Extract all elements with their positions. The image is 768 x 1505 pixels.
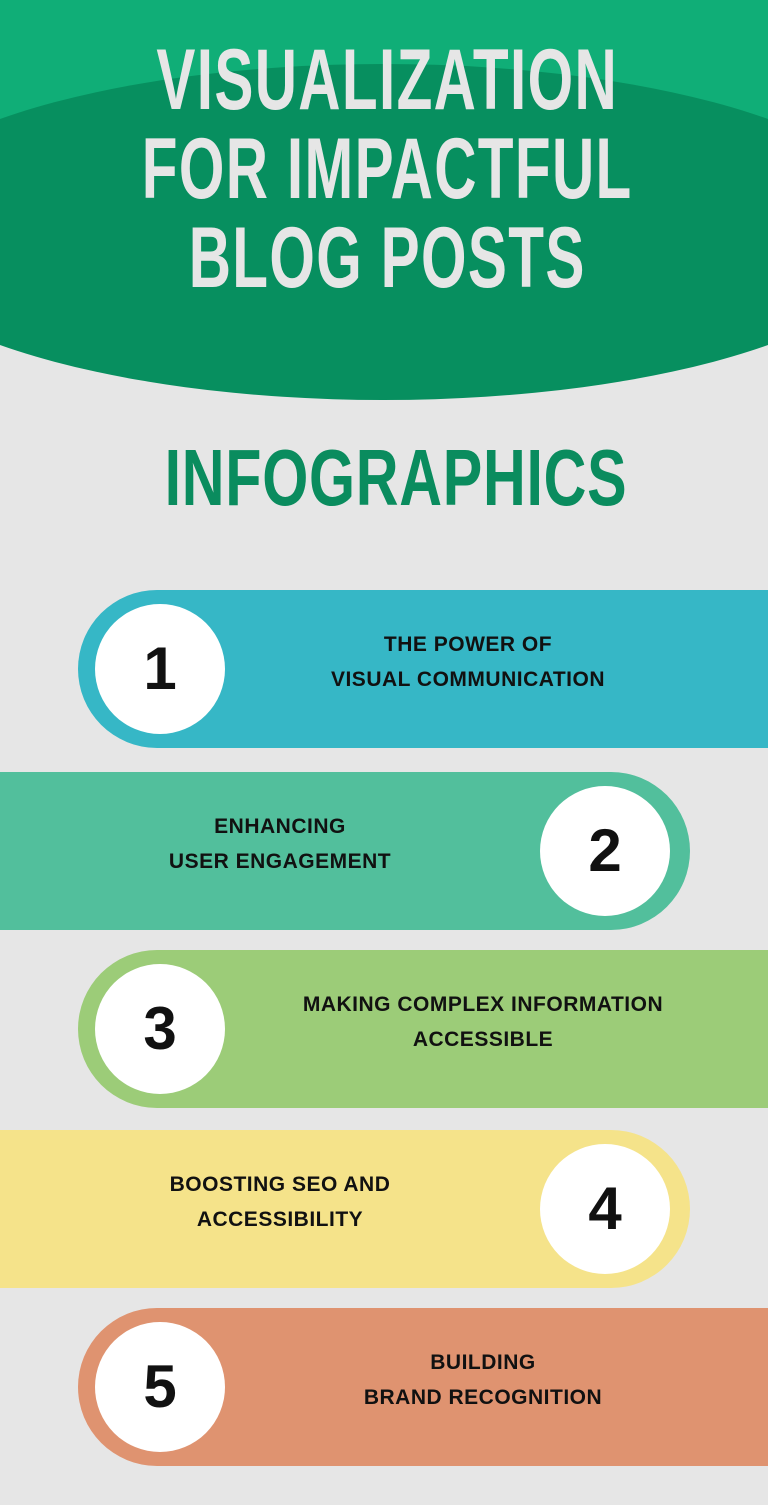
text 3: [303, 993, 663, 1051]
number 3: 3: [143, 995, 177, 1062]
text 3: ACCESSIBLE: [413, 1028, 553, 1051]
number 5: [95, 1322, 225, 1452]
number 2: 2: [588, 817, 622, 884]
text 5: BUILDING: [430, 1351, 536, 1374]
subtitle: INFOGRAPHICS: [165, 433, 627, 522]
text 5: BRAND RECOGNITION: [364, 1386, 602, 1409]
text 3: MAKING COMPLEX INFORMATION: [303, 993, 663, 1016]
item 3: [78, 950, 768, 1108]
text 4: BOOSTING SEO AND: [170, 1173, 390, 1196]
item 4: [0, 1130, 690, 1288]
item 2: [0, 772, 690, 930]
title: FOR IMPACTFUL: [142, 121, 633, 217]
text 4: ACCESSIBILITY: [197, 1208, 363, 1231]
title: BLOG POSTS: [189, 210, 586, 306]
text 5: [364, 1351, 602, 1409]
text 2: [169, 815, 391, 873]
number 3: [95, 964, 225, 1094]
text 2: ENHANCING: [214, 815, 346, 838]
item 5: [78, 1308, 768, 1466]
text 2: USER ENGAGEMENT: [169, 850, 391, 873]
title: [142, 32, 633, 306]
text 1: [331, 633, 605, 691]
title: VISUALIZATION: [156, 32, 618, 128]
text 4: [170, 1173, 390, 1231]
number 5: 5: [143, 1353, 177, 1420]
header: [0, 0, 768, 400]
number 1: [95, 604, 225, 734]
number 4: [540, 1144, 670, 1274]
number 2: [540, 786, 670, 916]
text 1: VISUAL COMMUNICATION: [331, 668, 605, 691]
number 4: 4: [588, 1175, 622, 1242]
text 1: THE POWER OF: [384, 633, 552, 656]
number 1: 1: [143, 635, 177, 702]
item 1: [78, 590, 768, 748]
